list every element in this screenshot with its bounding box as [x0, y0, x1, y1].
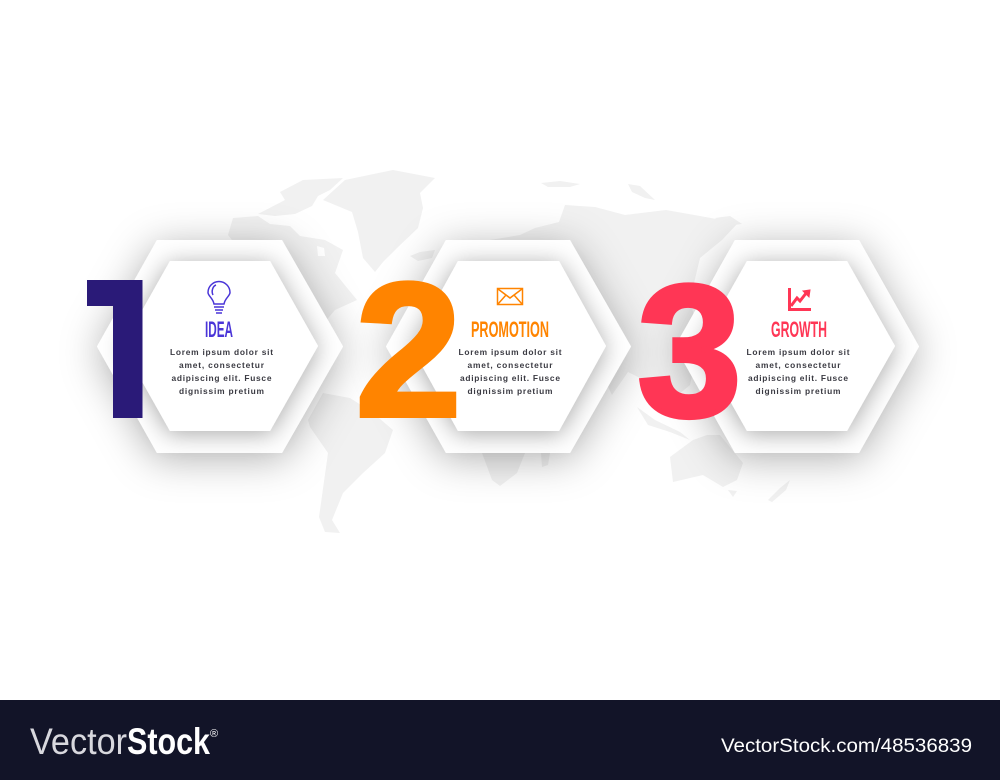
text block 1 — [170, 347, 273, 396]
inner hexagon 2 — [411, 261, 606, 431]
text block 1: amet, consectetur — [179, 360, 265, 370]
step 1 hexagons — [97, 240, 343, 453]
number 2: 2 — [356, 244, 461, 456]
number 1 — [87, 280, 142, 418]
text block 3: dignissim pretium — [756, 386, 840, 396]
heading: GROWTH: GROWTH — [771, 317, 827, 342]
footer logo: Vector — [30, 721, 127, 762]
footer image id: VectorStock.com/48536839 — [721, 736, 972, 757]
text block 2: adipiscing elit. Fusce — [460, 373, 560, 383]
text block 1: dignissim pretium — [179, 386, 264, 396]
text block 3 — [746, 347, 850, 396]
inner hexagon 1 — [122, 261, 318, 431]
heading: PROMOTION: PROMOTION — [471, 317, 549, 342]
world map — [228, 170, 790, 533]
text block 2: amet, consectetur — [468, 360, 553, 370]
step 3 hexagons — [675, 240, 919, 453]
text block 2: Lorem ipsum dolor sit — [458, 347, 562, 357]
footer logo: Stock — [127, 721, 210, 762]
text block 1: Lorem ipsum dolor sit — [170, 347, 273, 357]
icon: light bulb — [208, 282, 230, 313]
number 1: 1 — [56, 240, 192, 460]
outer hexagon 3 — [675, 240, 919, 453]
text block 2 — [458, 347, 562, 396]
step 2 hexagons — [386, 240, 631, 453]
footer bar — [0, 700, 1000, 780]
text block 3: Lorem ipsum dolor sit — [746, 347, 850, 357]
icon: envelope — [498, 288, 522, 304]
inner hexagon 3 — [699, 261, 895, 431]
outer hexagon 2 — [386, 240, 631, 453]
text block 1: adipiscing elit. Fusce — [172, 373, 272, 383]
outer hexagon 1 — [97, 240, 343, 453]
footer logo — [30, 721, 210, 762]
text block 3: amet, consectetur — [756, 360, 841, 370]
text block 2: dignissim pretium — [468, 386, 552, 396]
text block 3: adipiscing elit. Fusce — [748, 373, 848, 383]
heading: IDEA: IDEA — [205, 317, 233, 342]
number 3: 3 — [637, 246, 742, 456]
registered mark: ® — [210, 728, 218, 740]
icon: growth chart — [790, 288, 811, 310]
